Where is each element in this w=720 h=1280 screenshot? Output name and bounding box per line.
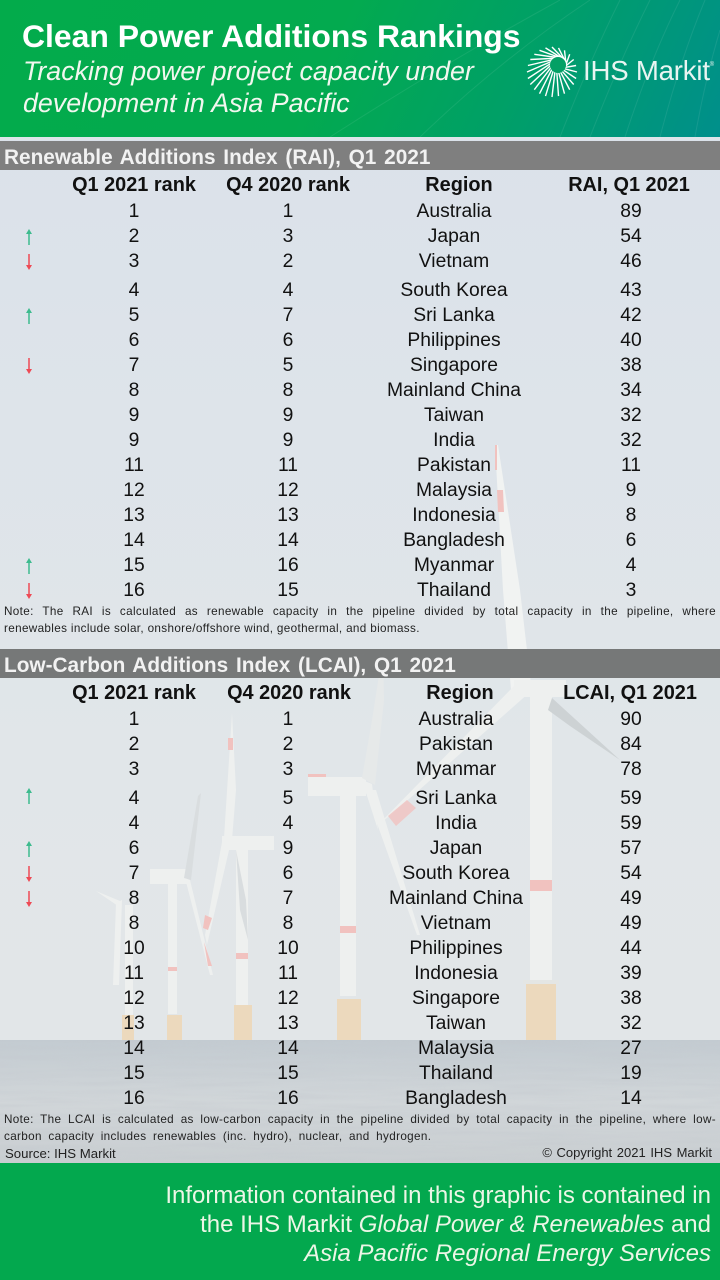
LCAI table: 14 <box>123 1038 145 1059</box>
LCAI table: 44 <box>620 938 642 959</box>
subtitle: development in Asia Pacific <box>23 88 350 118</box>
LCAI table: 4 <box>283 813 293 834</box>
RAI table: 11 <box>278 455 298 476</box>
LCAI table: 4 <box>129 788 139 809</box>
LCAI table: 3 <box>129 759 139 780</box>
RAI table: 9 <box>283 430 293 451</box>
footer banner <box>0 1163 720 1280</box>
RAI table: 16 <box>123 580 145 601</box>
RAI table: 3 <box>283 226 293 247</box>
LCAI table: 54 <box>620 863 642 884</box>
subtitle <box>23 56 475 118</box>
RAI table <box>72 174 690 601</box>
RAI table: 13 <box>277 505 299 526</box>
RAI movement arrows <box>26 229 32 599</box>
RAI table: India <box>433 430 475 451</box>
RAI table: 32 <box>620 405 642 426</box>
RAI table: Indonesia <box>412 505 496 526</box>
LCAI table: 12 <box>123 988 145 1009</box>
far turbine <box>113 900 122 985</box>
LCAI table: 4 <box>129 813 139 834</box>
RAI table: 9 <box>129 430 139 451</box>
background photo: offshore wind turbines <box>0 445 720 1163</box>
source: Source: IHS Markit <box>5 1146 116 1161</box>
RAI table: 16 <box>277 555 299 576</box>
LCAI table: 16 <box>123 1088 145 1109</box>
RAI table: 12 <box>123 480 145 501</box>
RAI table: Singapore <box>410 355 498 376</box>
LCAI table: 10 <box>277 938 299 959</box>
LCAI table: India <box>435 813 477 834</box>
heading bar: Renewable Additions Index (RAI), Q1 2021 <box>4 146 430 169</box>
decorative header lines <box>330 0 720 137</box>
LCAI table: 12 <box>277 988 299 1009</box>
RAI table: 4 <box>626 555 636 576</box>
RAI table: 15 <box>277 580 299 601</box>
RAI table: 14 <box>123 530 145 551</box>
LCAI table: Singapore <box>412 988 500 1009</box>
RAI table: RAI, Q1 2021 <box>568 174 690 196</box>
LCAI table: 49 <box>620 913 642 934</box>
heading bar <box>0 649 720 678</box>
icon: spiral burst <box>526 46 578 98</box>
LCAI table: Indonesia <box>414 963 498 984</box>
LCAI table: 11 <box>278 963 298 984</box>
RAI table: 5 <box>283 355 293 376</box>
LCAI table: 2 <box>283 734 293 755</box>
LCAI table: 19 <box>620 1063 642 1084</box>
RAI table: 1 <box>283 201 293 222</box>
RAI table: 9 <box>626 480 636 501</box>
LCAI table: 15 <box>123 1063 145 1084</box>
LCAI table: LCAI, Q1 2021 <box>563 682 697 704</box>
RAI table: Q1 2021 rank <box>72 174 196 196</box>
RAI table: 7 <box>283 305 293 326</box>
LCAI table: 14 <box>277 1038 299 1059</box>
header banner <box>0 0 720 137</box>
RAI table: 3 <box>129 251 139 272</box>
LCAI table: Taiwan <box>426 1013 486 1034</box>
copyright: © Copyright 2021 IHS Markit <box>542 1145 712 1160</box>
LCAI table: 1 <box>129 709 139 730</box>
RAI table: 11 <box>621 455 641 476</box>
LCAI table: 7 <box>129 863 139 884</box>
RAI table: 3 <box>626 580 636 601</box>
panel: Renewable Additions Index <box>0 141 720 634</box>
RAI table: 32 <box>620 430 642 451</box>
logo wordmark: IHS Markit® <box>583 55 714 86</box>
RAI note <box>4 605 716 634</box>
LCAI table: 57 <box>620 838 642 859</box>
footer text: Information contained in this graphic is contained in <box>165 1182 711 1209</box>
LCAI table: Thailand <box>419 1063 493 1084</box>
LCAI note <box>4 1113 716 1142</box>
panel: Low-Carbon Additions Index <box>0 649 720 1161</box>
LCAI table: 32 <box>620 1013 642 1034</box>
footer text <box>165 1182 711 1267</box>
RAI table: Taiwan <box>424 405 484 426</box>
RAI table: 34 <box>620 380 642 401</box>
LCAI table: 5 <box>283 788 293 809</box>
RAI table: 43 <box>620 280 642 301</box>
LCAI table: 8 <box>129 888 139 909</box>
RAI table: Sri Lanka <box>413 305 495 326</box>
RAI table: 6 <box>283 330 293 351</box>
RAI table: Malaysia <box>416 480 492 501</box>
RAI table: Australia <box>416 201 492 222</box>
LCAI table: Australia <box>418 709 494 730</box>
turbine 4 <box>150 869 187 884</box>
LCAI table: 11 <box>124 963 144 984</box>
RAI table: Pakistan <box>417 455 491 476</box>
RAI table: 5 <box>129 305 139 326</box>
LCAI table: 8 <box>129 913 139 934</box>
LCAI table: 15 <box>277 1063 299 1084</box>
LCAI table: 84 <box>620 734 642 755</box>
LCAI note: Note: The LCAI is calculated as low-carbon capacity in the pipeline divided by total capacity in the pipeline, where low- <box>4 1113 716 1126</box>
LCAI table: 1 <box>283 709 293 730</box>
RAI table: 15 <box>123 555 145 576</box>
LCAI table: 49 <box>620 888 642 909</box>
turbine 1 <box>515 680 565 697</box>
RAI table: Q4 2020 rank <box>226 174 350 196</box>
RAI table: 8 <box>129 380 139 401</box>
LCAI table: 2 <box>129 734 139 755</box>
RAI table: 11 <box>124 455 144 476</box>
LCAI table: 59 <box>620 788 642 809</box>
heading bar: Low-Carbon Additions Index (LCAI), Q1 2021 <box>4 654 456 677</box>
RAI table: 42 <box>620 305 642 326</box>
LCAI table: 13 <box>123 1013 145 1034</box>
LCAI table: Mainland China <box>389 888 523 909</box>
RAI note: renewables include solar, onshore/offshore wind, geothermal, and biomass. <box>4 622 420 634</box>
LCAI table: Japan <box>430 838 482 859</box>
LCAI table: Myanmar <box>416 759 496 780</box>
LCAI table: 78 <box>620 759 642 780</box>
subtitle: Tracking power project capacity under <box>23 56 474 86</box>
RAI table: 2 <box>129 226 139 247</box>
logo: IHS Markit <box>526 46 714 98</box>
LCAI table: 7 <box>283 888 293 909</box>
RAI table: 4 <box>129 280 139 301</box>
RAI table: 89 <box>620 201 642 222</box>
RAI table: 9 <box>283 405 293 426</box>
LCAI table: South Korea <box>402 863 510 884</box>
LCAI table: 6 <box>129 838 139 859</box>
LCAI table: 59 <box>620 813 642 834</box>
turbine 2 <box>308 777 366 796</box>
LCAI movement arrows <box>26 788 32 907</box>
RAI table: 6 <box>129 330 139 351</box>
RAI table: Philippines <box>407 330 501 351</box>
RAI table: 6 <box>626 530 636 551</box>
LCAI table: 90 <box>620 709 642 730</box>
RAI table: 7 <box>129 355 139 376</box>
heading bar <box>0 141 720 170</box>
LCAI note: carbon capacity includes renewables (inc. hydro), nuclear, and hydrogen. <box>4 1130 431 1142</box>
LCAI table: Q1 2021 rank <box>72 682 196 704</box>
LCAI table: Vietnam <box>421 913 491 934</box>
LCAI table: Sri Lanka <box>415 788 497 809</box>
RAI table: 38 <box>620 355 642 376</box>
LCAI table: 13 <box>277 1013 299 1034</box>
RAI table: 8 <box>283 380 293 401</box>
LCAI table: 38 <box>620 988 642 1009</box>
turbine 3 <box>222 836 274 850</box>
footer text: Asia Pacific Regional Energy Services <box>304 1240 711 1267</box>
LCAI table: 9 <box>283 838 293 859</box>
LCAI table: 27 <box>620 1038 642 1059</box>
RAI table: Myanmar <box>414 555 494 576</box>
RAI note: Note: The RAI is calculated as renewable capacity in the pipeline divided by total capacity in the pipeline, where <box>4 605 716 618</box>
RAI table: 9 <box>129 405 139 426</box>
RAI table: 13 <box>123 505 145 526</box>
LCAI table: 3 <box>283 759 293 780</box>
RAI table: Thailand <box>417 580 491 601</box>
RAI table: Region <box>425 174 493 196</box>
LCAI table: Malaysia <box>418 1038 494 1059</box>
RAI table: 8 <box>626 505 636 526</box>
LCAI table: 10 <box>123 938 145 959</box>
RAI table: 2 <box>283 251 293 272</box>
RAI table: Vietnam <box>419 251 489 272</box>
LCAI table: Q4 2020 rank <box>227 682 351 704</box>
RAI table: Japan <box>428 226 480 247</box>
RAI table: 46 <box>620 251 642 272</box>
footer text: the IHS Markit Global Power & Renewables and <box>200 1211 711 1238</box>
LCAI table: Bangladesh <box>405 1088 507 1109</box>
RAI table: 1 <box>129 201 139 222</box>
LCAI table: Pakistan <box>419 734 493 755</box>
title: Clean Power Additions Rankings <box>22 18 521 54</box>
RAI table: Bangladesh <box>403 530 505 551</box>
LCAI table: Philippines <box>409 938 503 959</box>
LCAI table: 39 <box>620 963 642 984</box>
RAI table: 12 <box>277 480 299 501</box>
LCAI table: 16 <box>277 1088 299 1109</box>
RAI table: Mainland China <box>387 380 521 401</box>
RAI table: South Korea <box>400 280 508 301</box>
RAI table: 14 <box>277 530 299 551</box>
RAI table: 40 <box>620 330 642 351</box>
RAI table: 54 <box>620 226 642 247</box>
LCAI table: 8 <box>283 913 293 934</box>
LCAI table: 6 <box>283 863 293 884</box>
LCAI table: Region <box>426 682 494 704</box>
LCAI table: 14 <box>620 1088 642 1109</box>
RAI table: 4 <box>283 280 293 301</box>
